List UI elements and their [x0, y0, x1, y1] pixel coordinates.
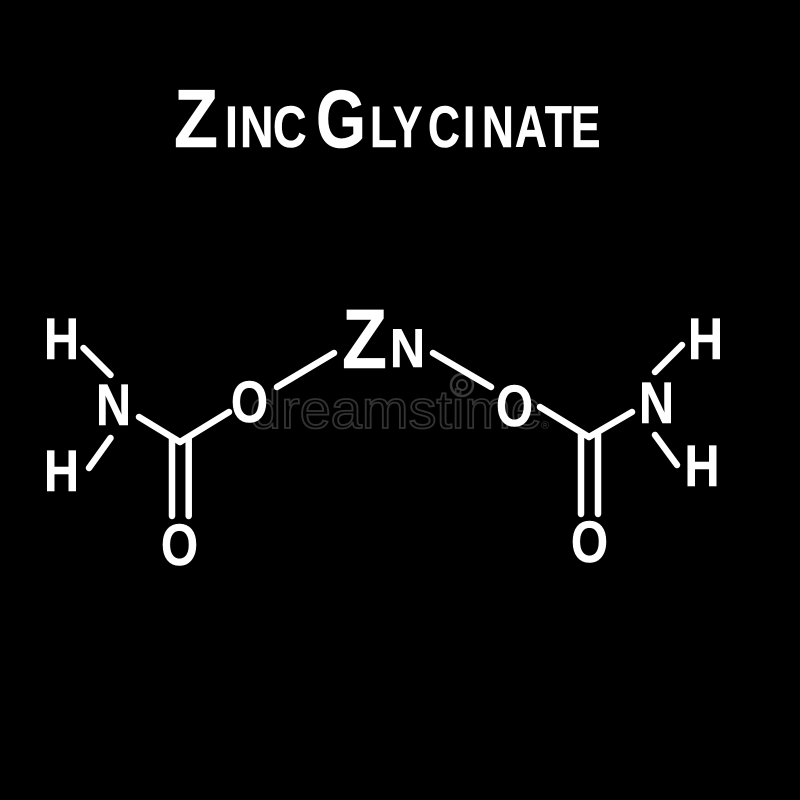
title: INC	[225, 95, 307, 160]
title	[174, 72, 600, 165]
central zinc atom: N	[390, 317, 425, 379]
atom: left bottom H: H	[44, 439, 79, 504]
title: G	[316, 74, 366, 165]
central zinc atom: Z	[342, 292, 387, 386]
atom: right N: N	[639, 371, 674, 436]
atom: right bridging O: O	[496, 374, 533, 439]
atom: right top H: H	[688, 307, 723, 372]
central zinc atom	[342, 292, 425, 386]
right glycinate ligand	[433, 307, 723, 575]
atom: right carbonyl O: O	[571, 510, 608, 575]
atom: left N: N	[96, 373, 131, 438]
title: Z	[174, 72, 218, 165]
title: LYCINATE	[370, 94, 600, 159]
watermark: ®	[541, 420, 549, 432]
atom: left bridging O: O	[231, 370, 268, 435]
watermark: dreamstime	[250, 380, 542, 440]
left glycinate ligand	[44, 307, 334, 578]
bonds: right ligand	[433, 345, 682, 514]
atom: left top H: H	[44, 307, 79, 372]
bonds: left ligand	[84, 348, 334, 516]
atom: right bottom H: H	[684, 434, 720, 499]
atom: left carbonyl O: O	[161, 513, 198, 578]
